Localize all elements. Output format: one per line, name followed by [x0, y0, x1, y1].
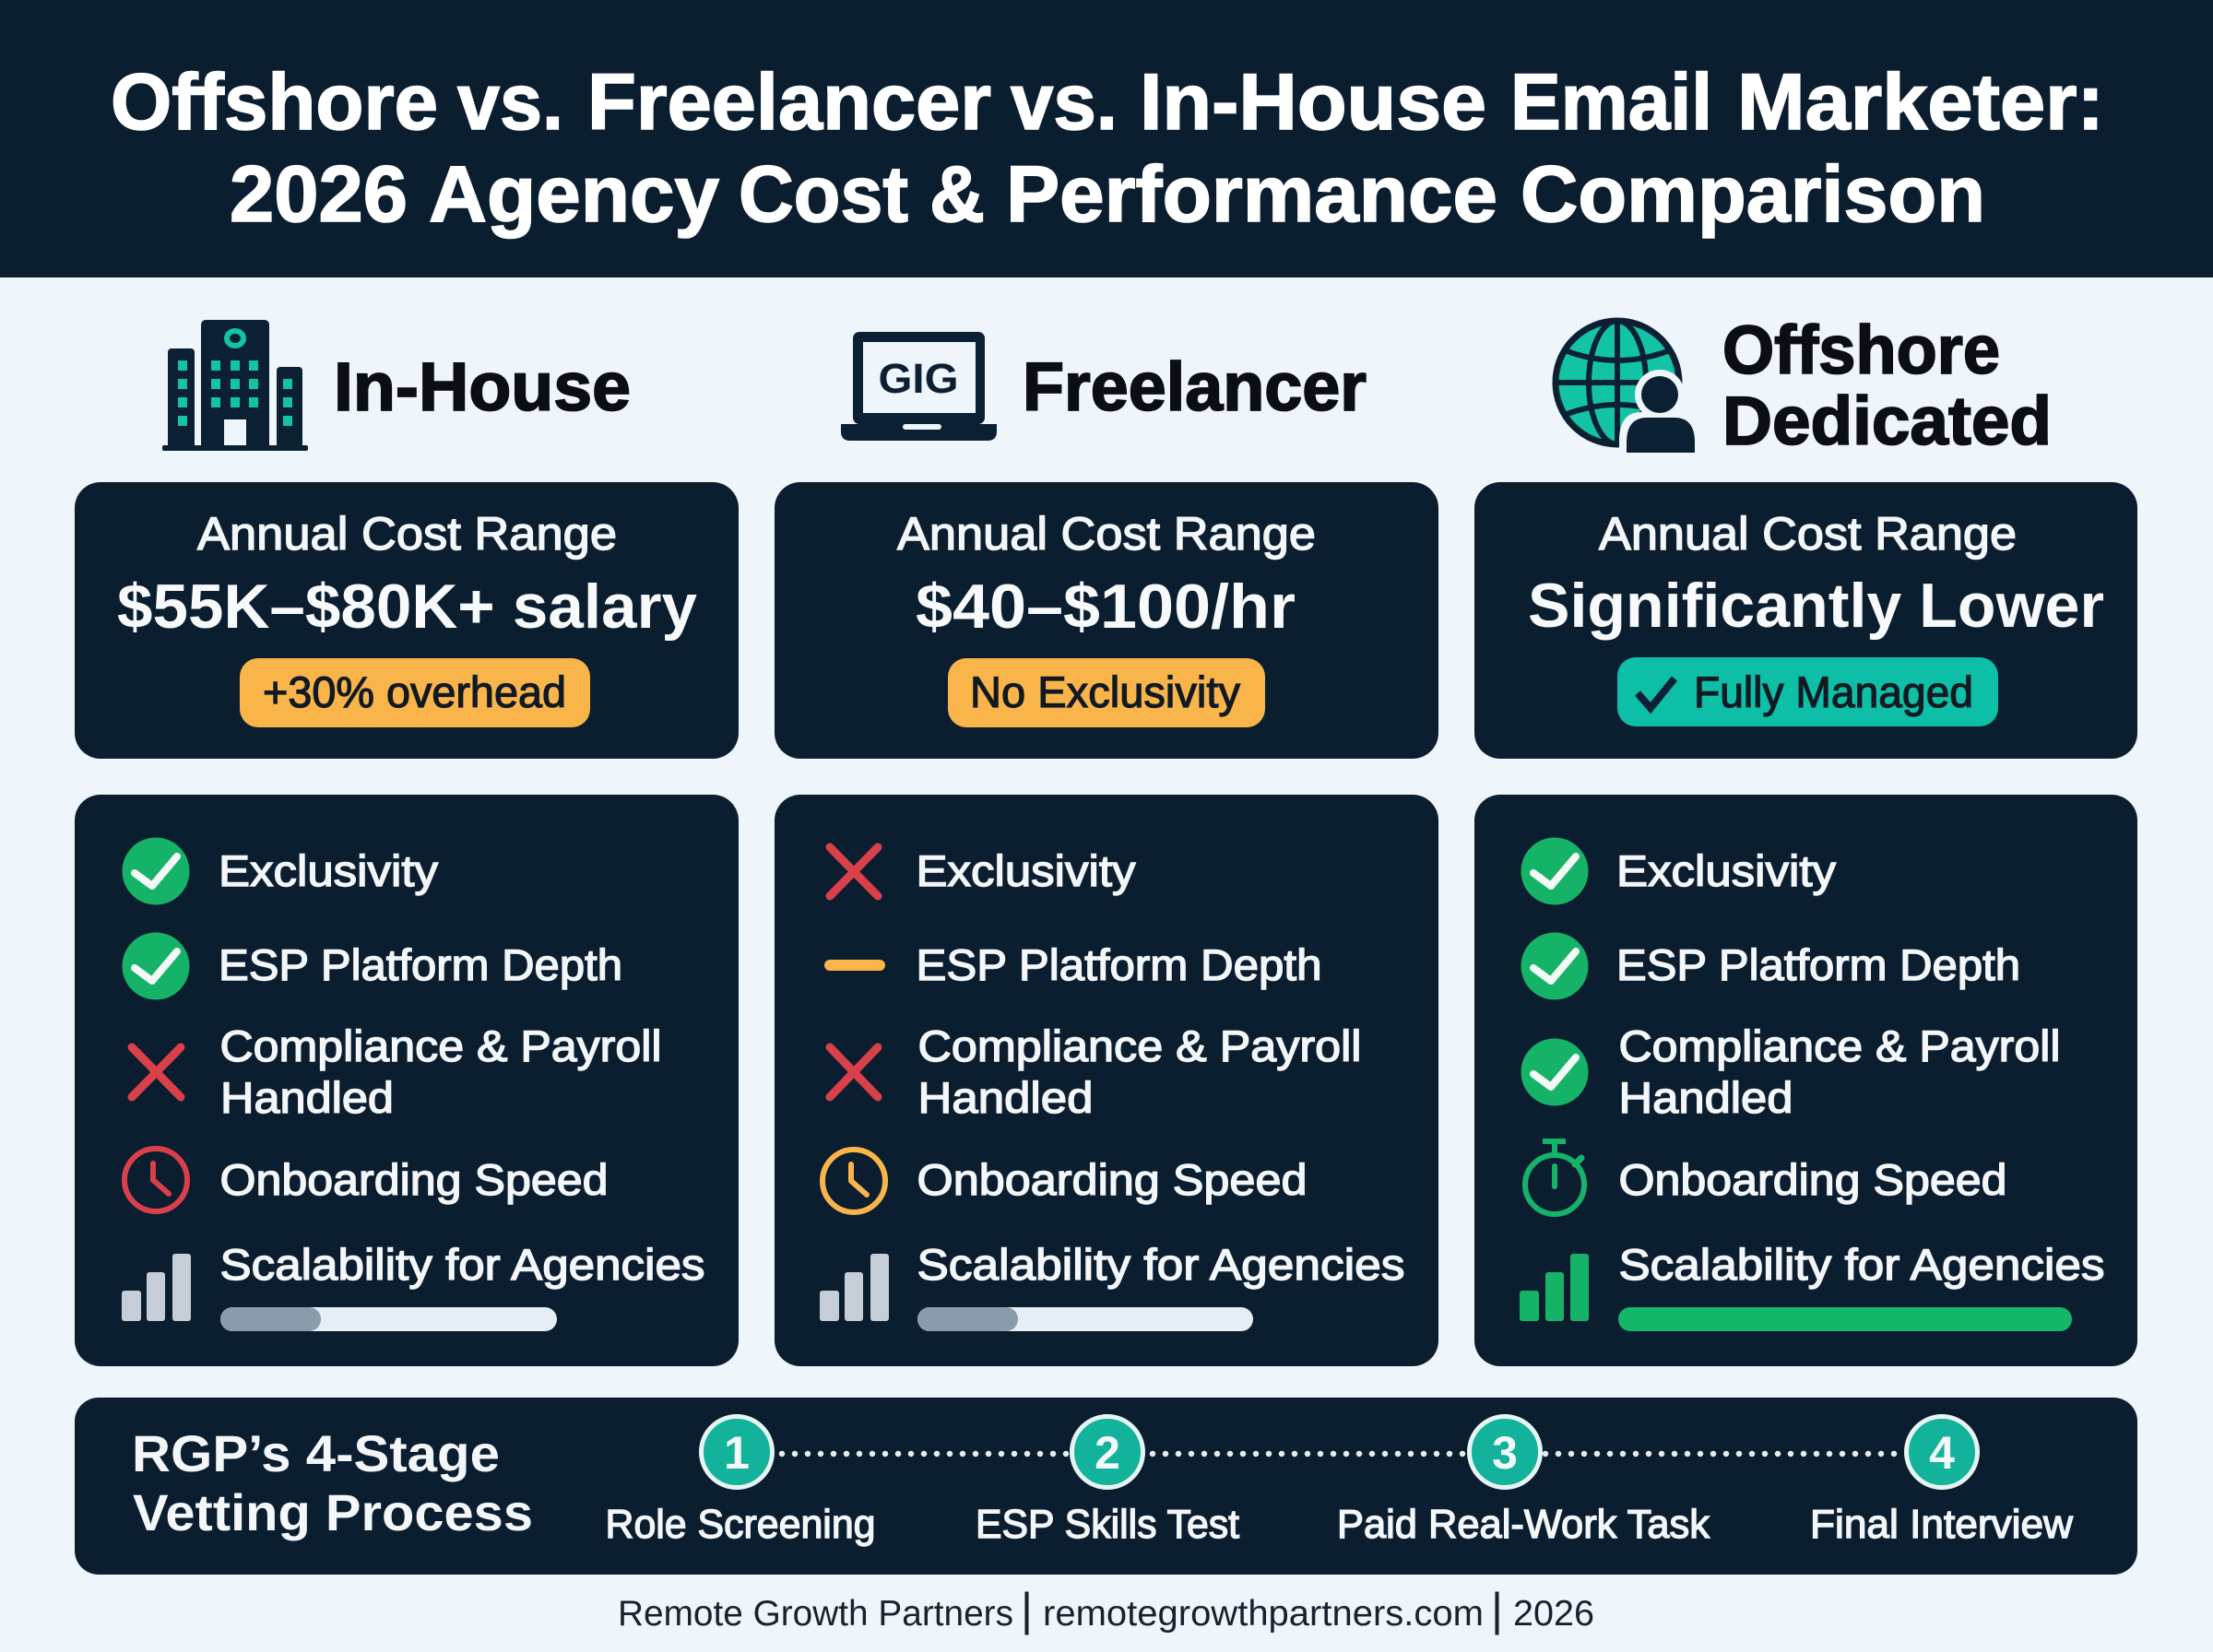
cost value: $55K–$80K+ salary [117, 572, 697, 642]
icon: stopwatch [1525, 1141, 1584, 1214]
badge: no exclusivity: No Exclusivity [970, 667, 1240, 716]
icon: medium clock [822, 1150, 885, 1212]
title banner [0, 0, 2213, 277]
heading: Offshore Dedicated: Offshore [1722, 312, 2000, 388]
column header: Offshore Dedicated [1556, 312, 2052, 459]
step 4: Final Interview [1810, 1502, 2073, 1547]
title banner: Freelancer [587, 58, 991, 147]
icon: cross [830, 847, 878, 896]
title banner: In-House [1140, 58, 1486, 147]
cost label: Annual Cost Range [197, 508, 617, 560]
step 4 [1810, 1416, 2073, 1547]
step 2 [976, 1416, 1239, 1547]
icon: laptop with GIG: GIG [878, 355, 959, 402]
cost label: Annual Cost Range [897, 508, 1316, 560]
feature: Onboarding Speed: Onboarding Speed [917, 1155, 1308, 1204]
step 1: 1 [724, 1427, 750, 1479]
heading: vetting process: RGP’s 4-Stage [132, 1424, 500, 1482]
panel: Offshore cost [1474, 482, 2137, 759]
title banner: Marketer: [1737, 58, 2104, 147]
step 1 [605, 1416, 876, 1547]
dotted connectors [782, 1451, 1903, 1457]
step 4: 4 [1929, 1427, 1955, 1479]
icon: office building [162, 320, 308, 451]
step 1: Role Screening [605, 1502, 876, 1547]
badge: fully managed: Fully Managed [1694, 667, 1973, 716]
feature: Compliance and Payroll Handled: Compliance & Payroll [1619, 1021, 2060, 1070]
footer credit [618, 1584, 1594, 1635]
icon: laptop with GIG [841, 332, 997, 441]
feature: Scalability for Agencies: Scalability for Agencies [219, 1240, 704, 1289]
feature: Scalability for Agencies: Scalability for Agencies [1619, 1240, 2104, 1289]
feature: Scalability for Agencies: Scalability for Agencies [917, 1240, 1405, 1289]
heading: In-House: In-House [334, 348, 631, 425]
icon: scalability bars [1520, 1254, 1589, 1321]
icon: globe with person [1556, 321, 1700, 453]
heading: Offshore Dedicated [1722, 312, 2052, 459]
panel: Freelancer cost [775, 482, 1438, 759]
title banner: Agency [429, 150, 719, 239]
panel: Freelancer features [775, 795, 1438, 1366]
progress bar: full [1618, 1307, 2072, 1331]
cost label: Annual Cost Range [1599, 508, 2017, 560]
feature: Compliance and Payroll Handled: Handled [220, 1073, 394, 1122]
icon: check [1521, 1038, 1588, 1106]
step 3: 3 [1492, 1427, 1518, 1479]
title banner: & [929, 150, 985, 239]
icon: check [1521, 837, 1588, 905]
badge: no exclusivity [948, 658, 1265, 727]
feature: Compliance and Payroll Handled: Handled [1619, 1073, 1793, 1122]
title banner: Cost [739, 150, 908, 239]
column header: Freelancer [841, 332, 1367, 441]
panel: In-House features [75, 795, 739, 1366]
badge: overhead: +30% overhead [263, 667, 566, 716]
icon: check [122, 933, 190, 999]
title banner: Comparison [1521, 150, 1985, 239]
footer credit: remotegrowthpartners.com [1043, 1594, 1484, 1634]
icon: dash [824, 960, 885, 971]
icon: cross [132, 1047, 181, 1097]
footer credit: | [1491, 1584, 1503, 1635]
title banner: Email [1510, 58, 1712, 147]
heading: Freelancer: Freelancer [1023, 348, 1367, 425]
title banner: vs. [457, 58, 563, 147]
cost value: $40–$100/hr [916, 572, 1296, 642]
feature: ESP Platform Depth: ESP Platform Depth [917, 940, 1322, 989]
feature: Exclusivity: Exclusivity [917, 846, 1136, 895]
icon: check [1521, 933, 1588, 999]
badge: overhead [240, 658, 590, 727]
icon: slow clock [124, 1149, 187, 1211]
step 3: Paid Real-Work Task [1337, 1502, 1710, 1547]
icon: check [122, 837, 190, 905]
feature: ESP Platform Depth: ESP Platform Depth [219, 940, 622, 989]
heading: vetting process [132, 1424, 533, 1541]
panel: In-House cost [75, 482, 739, 759]
icon: cross [830, 1047, 878, 1097]
panel: vetting process [75, 1398, 2137, 1575]
title banner: Offshore [111, 58, 438, 147]
feature: ESP Platform Depth: ESP Platform Depth [1616, 940, 2020, 989]
icon: scalability bars [122, 1254, 191, 1321]
step 2: 2 [1095, 1427, 1120, 1479]
title banner: vs. [1011, 58, 1118, 147]
title banner: 2026 [230, 150, 408, 239]
feature: Onboarding Speed: Onboarding Speed [1619, 1155, 2006, 1204]
heading: vetting process: Vetting Process [133, 1483, 533, 1541]
step 3 [1337, 1416, 1710, 1547]
feature: Compliance and Payroll Handled [918, 1021, 1361, 1122]
footer credit: Remote Growth Partners [618, 1594, 1013, 1634]
feature: Onboarding Speed: Onboarding Speed [219, 1155, 609, 1204]
step 2: ESP Skills Test [976, 1502, 1239, 1547]
feature: Compliance and Payroll Handled: Compliance & Payroll [918, 1021, 1361, 1070]
cost value: Significantly Lower [1528, 571, 2104, 641]
footer credit: 2026 [1513, 1594, 1594, 1634]
feature: Exclusivity: Exclusivity [219, 846, 439, 895]
feature: Compliance and Payroll Handled [1619, 1021, 2060, 1122]
heading: Offshore Dedicated: Dedicated [1722, 383, 2052, 459]
column header: In-House [162, 320, 631, 451]
feature: Compliance and Payroll Handled: Handled [918, 1073, 1094, 1122]
progress bar: low [917, 1307, 1253, 1331]
icon: scalability bars [820, 1254, 889, 1321]
feature: Compliance and Payroll Handled: Compliance & Payroll [219, 1021, 662, 1070]
feature: Compliance and Payroll Handled [219, 1021, 662, 1122]
progress bar: low [220, 1307, 557, 1331]
title banner: Performance [1006, 150, 1497, 239]
badge: fully managed [1617, 657, 1998, 726]
footer credit: | [1021, 1584, 1033, 1635]
feature: Exclusivity: Exclusivity [1616, 846, 1837, 895]
panel: Offshore features [1474, 795, 2137, 1366]
